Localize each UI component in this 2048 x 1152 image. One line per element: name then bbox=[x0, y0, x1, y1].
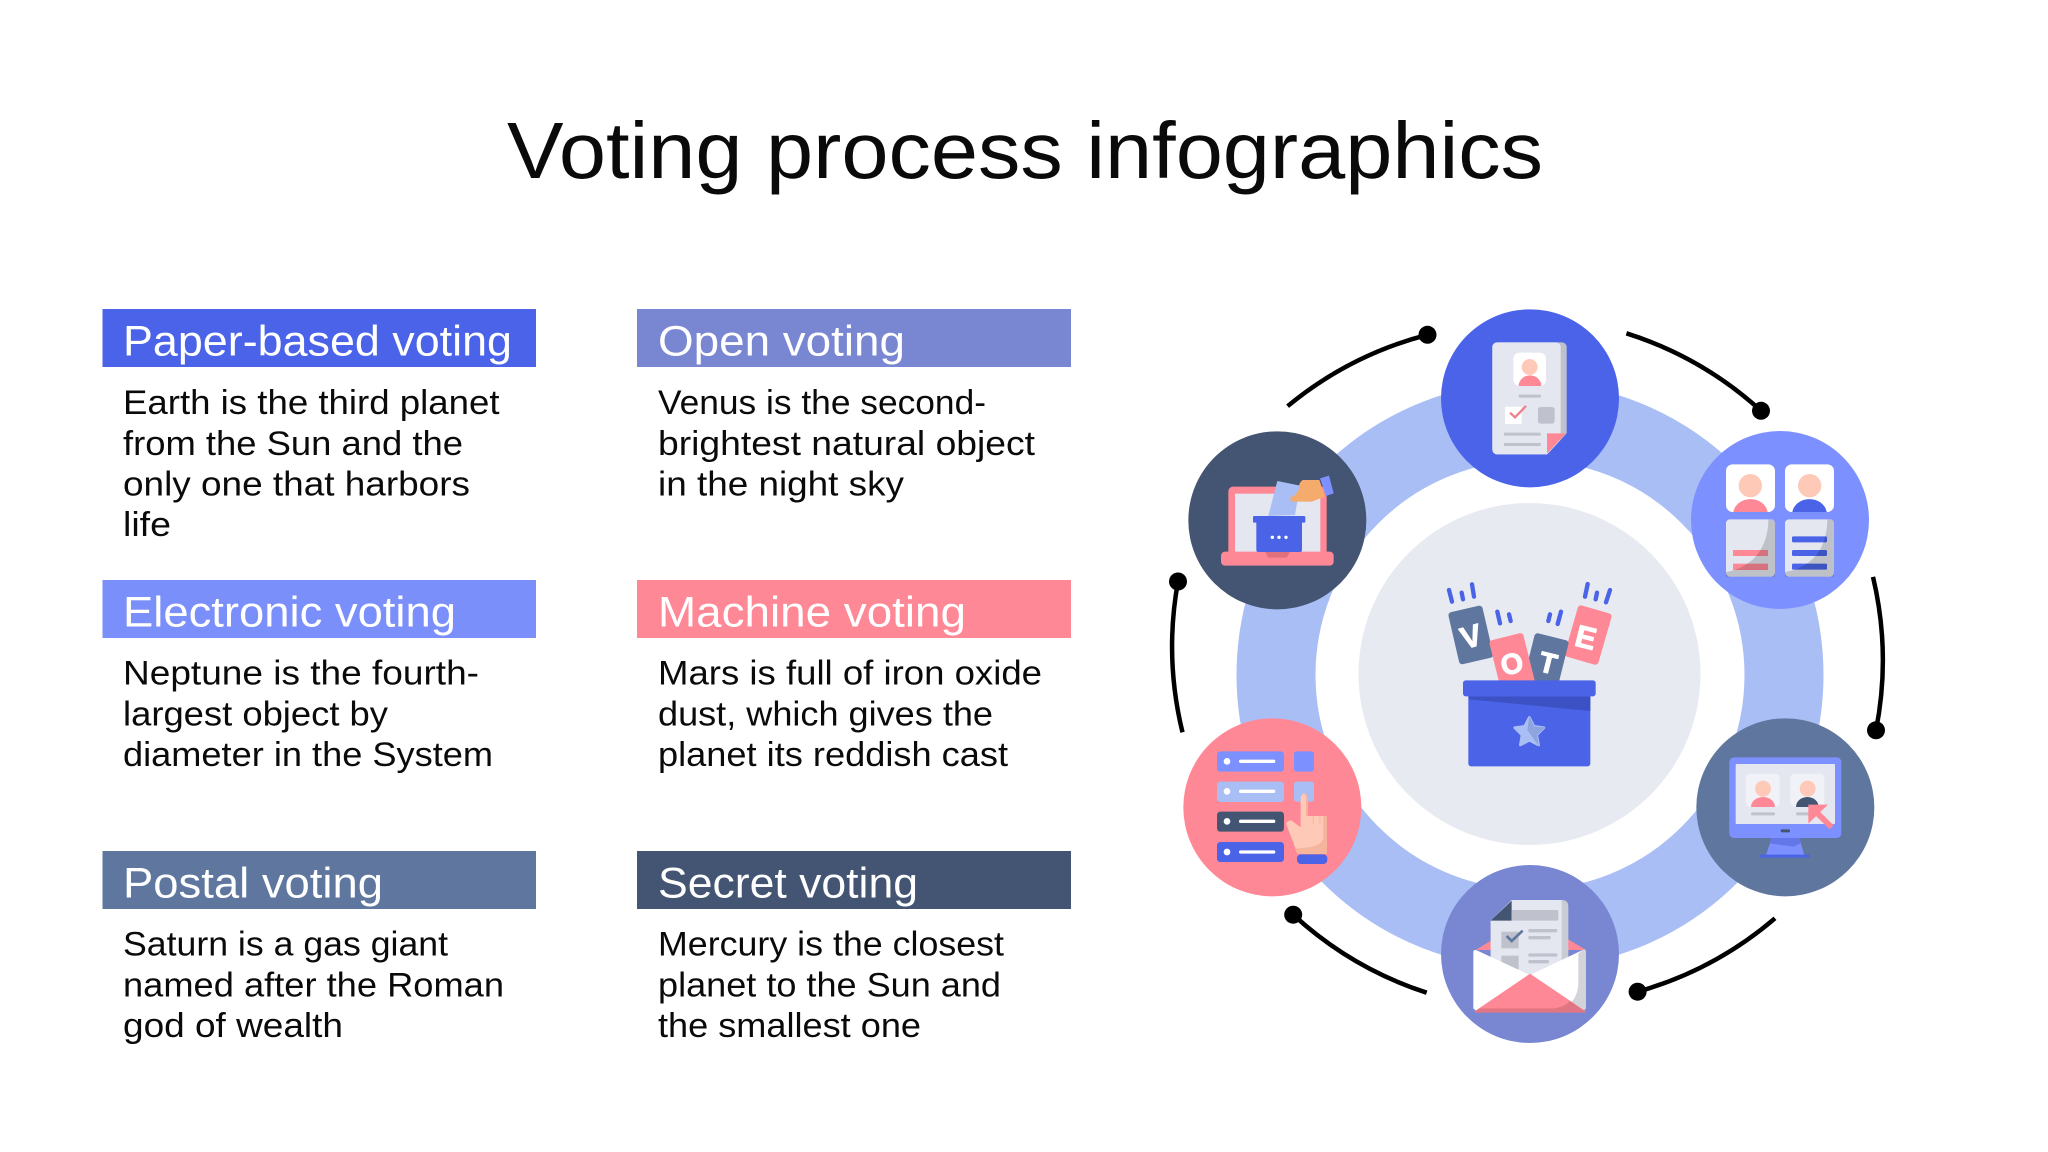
blue ring bbox=[1276, 421, 1784, 929]
panel: machine voting bbox=[637, 580, 1071, 774]
text: postal voting description bbox=[123, 926, 504, 1045]
text: machine voting description: dust, which gives the bbox=[658, 696, 993, 734]
arrow: arc left bbox=[1169, 572, 1187, 732]
icon circle: ballot paper bbox=[1441, 309, 1619, 487]
text: secret voting description: Mercury is the closest bbox=[658, 926, 1005, 964]
icon circle: online monitor bbox=[1696, 718, 1874, 896]
icon circle: laptop ballot bbox=[1188, 431, 1366, 609]
heading: postal voting bbox=[102, 851, 536, 909]
icon circle: postal envelope bbox=[1441, 865, 1619, 1043]
arrow: arc upper right bbox=[1626, 333, 1770, 420]
text: paper-based voting description bbox=[123, 384, 500, 544]
arrow: arc upper left bbox=[1288, 326, 1436, 406]
icon: vote box centre: T bbox=[1535, 646, 1561, 682]
panel: paper-based voting bbox=[102, 309, 536, 544]
ring diagram bbox=[1169, 309, 1885, 1043]
text: paper-based voting description: only one that harbors bbox=[123, 466, 470, 504]
text: open voting description: brightest natural object bbox=[658, 425, 1036, 463]
heading: electronic voting bbox=[102, 580, 536, 638]
title: Voting process infographics bbox=[507, 106, 1543, 195]
arrow: arc right bbox=[1867, 577, 1885, 739]
icon: vote box centre: O bbox=[1497, 646, 1527, 683]
text: electronic voting description: largest object by bbox=[123, 696, 388, 734]
text: open voting description: Venus is the second- bbox=[658, 384, 986, 422]
text: postal voting description: Saturn is a gas giant bbox=[123, 926, 449, 964]
heading: open voting: Open voting bbox=[658, 318, 905, 366]
heading: machine voting bbox=[637, 580, 1071, 638]
icon circle: machine touch list bbox=[1183, 718, 1361, 896]
central disc bbox=[1358, 503, 1700, 845]
text: electronic voting description: diameter in the System bbox=[123, 736, 493, 774]
heading: secret voting: Secret voting bbox=[658, 860, 918, 908]
arrow: arc lower left bbox=[1284, 906, 1427, 993]
arrow: arc lower right bbox=[1629, 918, 1775, 1001]
text: secret voting description: the smallest one bbox=[658, 1007, 921, 1045]
icon: vote box centre bbox=[1448, 584, 1612, 766]
text: machine voting description: planet its reddish cast bbox=[658, 736, 1009, 774]
text: paper-based voting description: life bbox=[123, 506, 171, 544]
icon: vote box centre: V bbox=[1457, 618, 1486, 656]
text: open voting description: in the night sky bbox=[658, 466, 904, 504]
text: paper-based voting description: Earth is the third planet bbox=[123, 384, 500, 422]
text: postal voting description: god of wealth bbox=[123, 1007, 343, 1045]
panel: electronic voting bbox=[102, 580, 536, 774]
text: secret voting description: planet to the Sun and bbox=[658, 966, 1001, 1004]
text: postal voting description: named after the Roman bbox=[123, 966, 504, 1004]
text: paper-based voting description: from the Sun and the bbox=[123, 425, 463, 463]
text: electronic voting description: Neptune is the fourth- bbox=[123, 654, 479, 692]
text: open voting description bbox=[658, 384, 1036, 504]
heading: secret voting bbox=[637, 851, 1071, 909]
heading: electronic voting: Electronic voting bbox=[123, 588, 456, 636]
text: secret voting description bbox=[658, 926, 1005, 1045]
heading: open voting bbox=[637, 309, 1071, 367]
heading: postal voting: Postal voting bbox=[123, 860, 383, 908]
heading: paper-based voting: Paper-based voting bbox=[123, 318, 512, 366]
text: machine voting description bbox=[658, 654, 1042, 774]
panel: secret voting bbox=[637, 851, 1071, 1045]
text: machine voting description: Mars is full of iron oxide bbox=[658, 654, 1042, 692]
icon: vote box centre: E bbox=[1572, 619, 1600, 657]
panel: postal voting bbox=[102, 851, 536, 1045]
heading: machine voting: Machine voting bbox=[658, 588, 966, 636]
panel: open voting bbox=[637, 309, 1071, 504]
icon circle: candidates bbox=[1691, 431, 1869, 609]
text: electronic voting description bbox=[123, 654, 493, 774]
